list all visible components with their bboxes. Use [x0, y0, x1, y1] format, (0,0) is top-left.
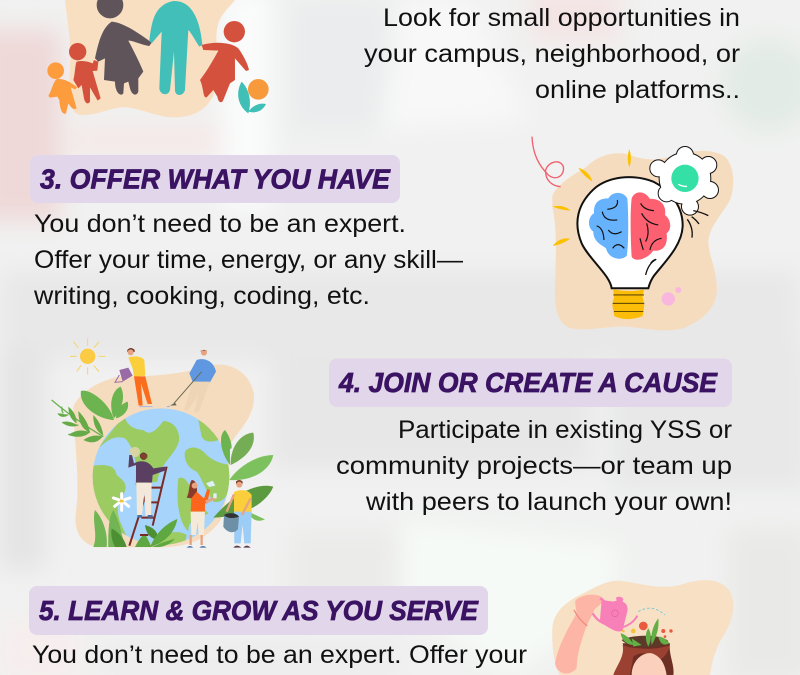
text: opportunities body: Look for small opportunities in	[383, 4, 740, 32]
heading: 3. offer what you have: 3. OFFER WHAT YOU HAVE	[40, 164, 391, 194]
text: offer body: Offer your time, energy, or any skill—	[34, 246, 463, 274]
text: join body: with peers to launch your own!	[365, 488, 732, 516]
text: join body	[336, 416, 732, 516]
text: offer body: You don’t need to be an expert.	[34, 210, 406, 238]
heading: 3. offer what you have	[30, 155, 400, 203]
heading: 4. join or create a cause	[329, 358, 732, 407]
text: join body: Participate in existing YSS or	[398, 416, 732, 444]
text: offer body: writing, cooking, coding, etc.	[33, 282, 370, 310]
illustration: light bulb with brain and gear	[532, 137, 733, 330]
text: opportunities body: your campus, neighborhood, or	[364, 40, 740, 68]
heading: 5. learn and grow as you serve	[29, 586, 488, 635]
illustration: watering a plant head	[552, 580, 733, 675]
heading: 5. learn and grow as you serve: 5. LEARN & GROW AS YOU SERVE	[39, 595, 479, 626]
heading: 4. join or create a cause: 4. JOIN OR CREATE A CAUSE	[338, 367, 718, 398]
text: join body: community projects—or team up	[336, 452, 732, 480]
text: opportunities body: online platforms..	[535, 76, 740, 104]
illustration: family	[47, 0, 269, 117]
text: offer body	[33, 210, 463, 310]
text: learn body: You don’t need to be an expert. Offer your	[32, 641, 527, 669]
text: opportunities body	[364, 4, 740, 104]
illustration: people caring for earth	[52, 338, 273, 552]
